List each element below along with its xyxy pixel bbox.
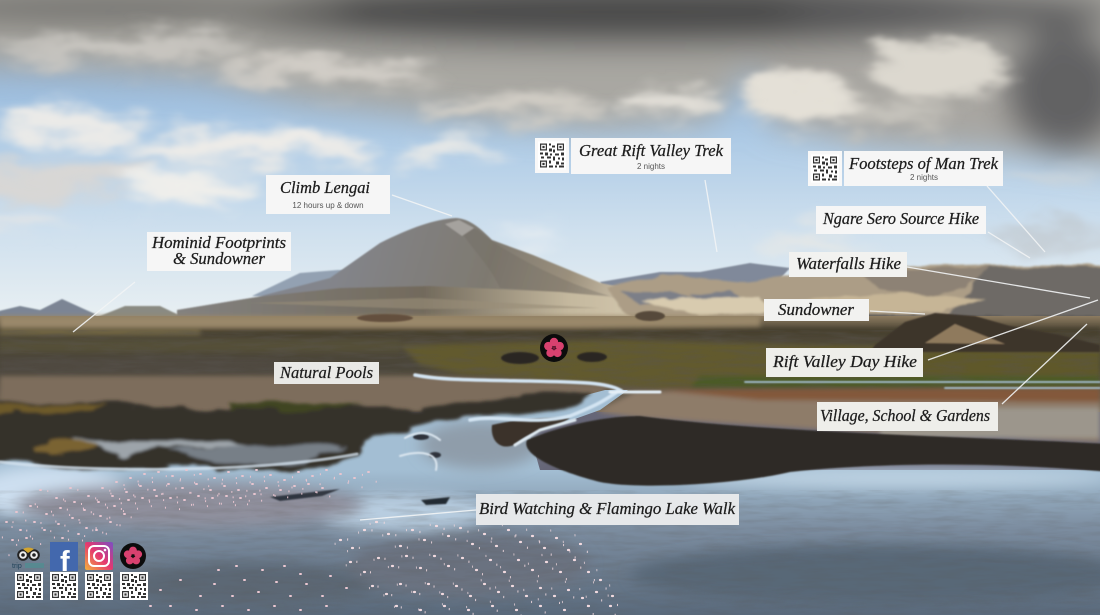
plains texture: [0, 330, 1100, 410]
distant hills: [0, 263, 790, 322]
social icons and QR codes: [12, 542, 148, 600]
label: Natural Pools: Natural Pools: [279, 363, 373, 382]
label: Waterfalls Hike: Waterfalls Hike: [796, 254, 901, 273]
label: Sundowner: [764, 299, 869, 321]
lake texture: [0, 490, 1100, 615]
label: Climb Lengai: 12 hours up & down: [292, 201, 364, 210]
label: Sundowner: Sundowner: [778, 300, 855, 319]
dark hill: [357, 311, 1100, 352]
icon: lodge flower logo: [540, 334, 568, 362]
label: Waterfalls Hike: [789, 252, 907, 277]
clouds: [0, 0, 1100, 248]
label: Rift Valley Day Hike: Rift Valley Day Hike: [772, 352, 917, 371]
dark mud delta: [270, 416, 1100, 505]
icon: Instagram: [85, 542, 113, 570]
label: Footsteps of Man Trek with QR: [808, 151, 1003, 186]
QR code: website: [120, 572, 148, 600]
QR code: Facebook: [50, 572, 78, 600]
QR code: Tripadvisor: [15, 572, 43, 600]
label: Footsteps of Man Trek with QR: Footsteps of Man Trek: [848, 154, 999, 173]
QR code: Instagram: [85, 572, 113, 600]
icon: Tripadvisor: trip: [12, 563, 22, 570]
label: Ngare Sero Source Hike: [816, 206, 986, 234]
label: Great Rift Valley Trek with QR: [535, 138, 731, 174]
lake: [0, 390, 1100, 615]
label: Hominid Footprints & Sundowner: Hominid Footprints: [151, 233, 286, 252]
left mud banks and foam shoals: [0, 392, 590, 470]
icon: Facebook: f: [60, 546, 70, 578]
label: Great Rift Valley Trek with QR: Great Rift Valley Trek: [579, 141, 724, 160]
label: Bird Watching & Flamingo Lake Walk: [476, 494, 739, 525]
river channels: [0, 375, 1100, 470]
label: Climb Lengai: [266, 175, 390, 214]
lake highlights: [0, 421, 1100, 607]
label: Village, School & Gardens: [817, 402, 998, 431]
sky background: [0, 0, 1100, 330]
bushes: [501, 352, 607, 364]
label: Hominid Footprints & Sundowner: & Sundowner: [173, 249, 266, 268]
label: Climb Lengai: Climb Lengai: [280, 178, 370, 197]
plains detail: [0, 316, 1100, 388]
label: Bird Watching & Flamingo Lake Walk: Bird Watching & Flamingo Lake Walk: [479, 499, 736, 518]
flamingo flock: [0, 470, 621, 615]
icon: flower logo: [120, 543, 146, 569]
label: Ngare Sero Source Hike: Ngare Sero Source Hike: [822, 209, 979, 228]
mountain: Ol Doinyo Lengai: [177, 218, 720, 322]
label: Village, School & Gardens: Village, School & Gardens: [820, 406, 990, 425]
label: Hominid Footprints & Sundowner: [147, 232, 291, 271]
label: Rift Valley Day Hike: [766, 348, 923, 377]
leader lines: [73, 180, 1098, 520]
label: Great Rift Valley Trek with QR: 2 nights: [637, 162, 665, 171]
plains: [0, 316, 1100, 412]
mud flats: [0, 376, 1100, 442]
right cliffs: Rift Valley escarpment: [606, 265, 1100, 332]
label: Footsteps of Man Trek with QR: 2 nights: [910, 173, 938, 182]
